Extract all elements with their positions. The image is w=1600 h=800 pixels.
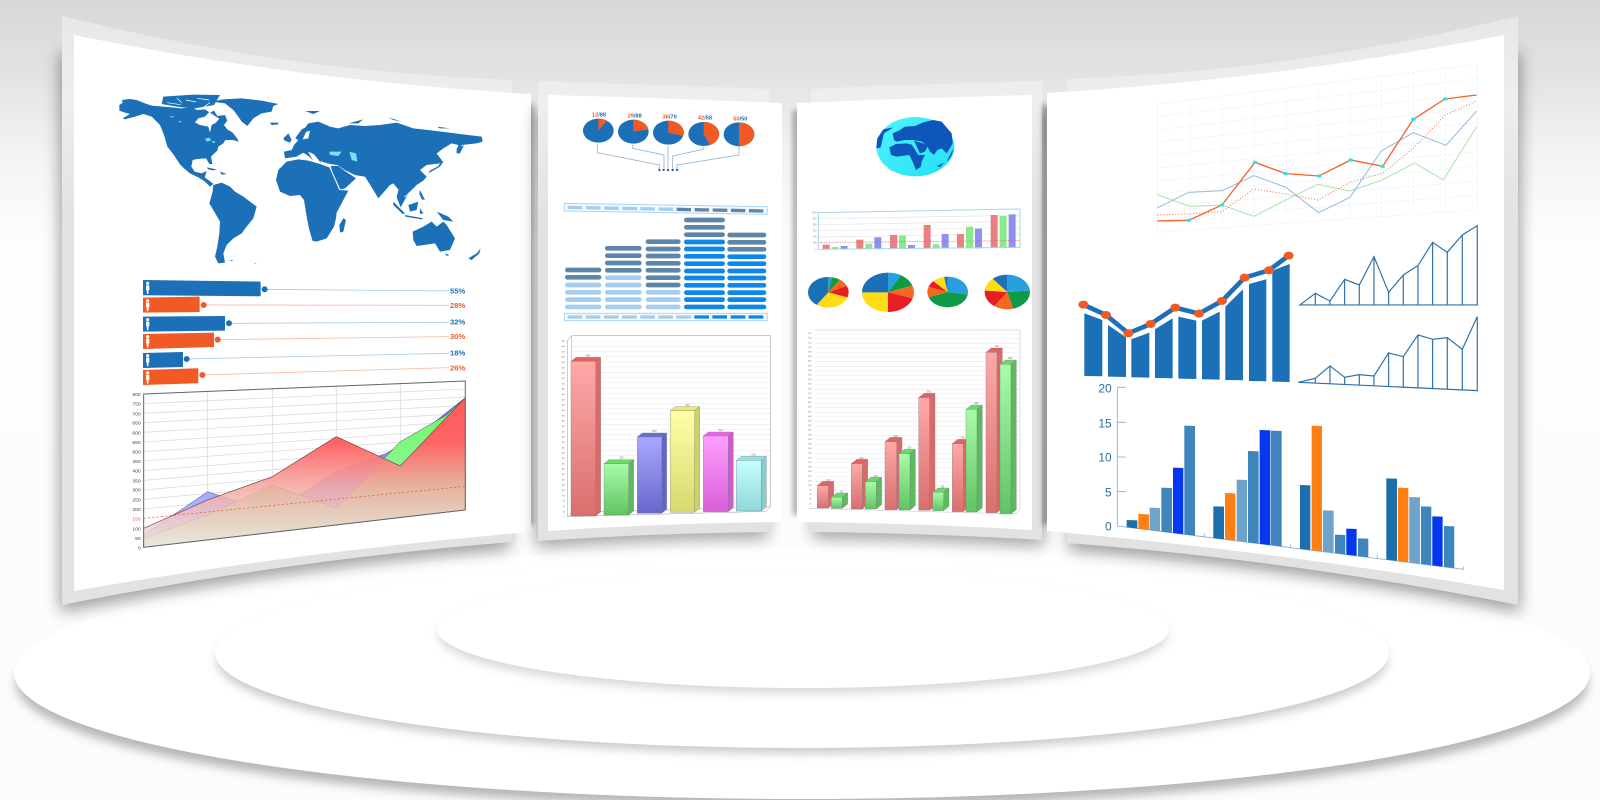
3D bar chart: 200 xyxy=(619,456,624,460)
small grouped bar chart: 150 xyxy=(813,242,817,244)
area chart: 0 xyxy=(138,545,141,551)
3D paired bar chart: 0 xyxy=(810,508,811,510)
horizontal percentage bars: 55% xyxy=(450,287,465,296)
3D paired bar chart: 700 xyxy=(994,344,999,348)
area chart: 400 xyxy=(132,469,141,475)
3D bar chart: 120 xyxy=(562,485,565,487)
3D bar chart: 100 xyxy=(562,490,565,492)
3D bar chart: 340 xyxy=(562,426,565,428)
pie 3 xyxy=(927,277,968,307)
3D paired bar chart: 760 xyxy=(808,333,811,335)
3D bar chart: 380 xyxy=(562,415,565,417)
small grouped bar chart: 600 xyxy=(813,225,817,227)
3D paired bar chart: 120 xyxy=(808,480,811,482)
3D paired bar chart: 200 xyxy=(808,462,811,464)
3D bar chart: 60 xyxy=(563,501,565,503)
area chart: 100 xyxy=(132,526,141,532)
grouped bar chart xyxy=(1098,382,1463,569)
3D bar chart: 460 xyxy=(562,394,565,396)
3D bar chart: 600 xyxy=(562,357,565,359)
pie 4 xyxy=(985,275,1030,309)
3D paired bar chart xyxy=(808,330,1020,514)
3D paired bar chart: 100 xyxy=(826,478,831,482)
3D bar chart: 500 xyxy=(562,383,565,385)
3D paired bar chart: 250 xyxy=(907,446,912,450)
3D paired bar chart: 580 xyxy=(808,375,811,377)
3D bar chart: 200 xyxy=(562,463,565,465)
area chart: 750 xyxy=(132,402,141,408)
four pie charts xyxy=(808,273,1030,312)
3D paired bar chart: 260 xyxy=(808,448,811,450)
area chart: 150 xyxy=(132,517,141,523)
3D paired bar chart: 700 xyxy=(808,347,811,349)
3D paired bar chart: 100 xyxy=(808,485,811,487)
stage: concentric floor ellipses xyxy=(14,547,1590,800)
3D paired bar chart: 420 xyxy=(808,411,811,413)
3D bar chart: 0 xyxy=(564,517,565,519)
pie 1 xyxy=(808,277,849,308)
3D paired bar chart: 20 xyxy=(809,503,811,505)
3D bar chart: 20 xyxy=(563,511,565,513)
3D paired bar chart: 600 xyxy=(808,370,811,372)
panel: centre-left pies and bar charts xyxy=(536,81,782,547)
grouped bar chart: 10 xyxy=(1098,451,1112,465)
horizontal percentage bars: 26% xyxy=(450,363,465,372)
3D bar chart: 220 xyxy=(751,453,756,457)
3D paired bar chart: 660 xyxy=(808,356,811,358)
grouped bar chart: 15 xyxy=(1098,416,1112,430)
3D paired bar chart: 300 xyxy=(808,439,811,441)
3D paired bar chart: 520 xyxy=(808,388,811,390)
3D bar chart: 360 xyxy=(562,421,565,423)
stacked pill column chart xyxy=(564,203,767,321)
area chart: 300 xyxy=(132,488,141,494)
fraction pies with connectors: 50/50 xyxy=(733,116,747,122)
3D bar chart: 540 xyxy=(562,373,565,375)
3D paired bar chart: 360 xyxy=(808,425,811,427)
small grouped bar chart: 300 xyxy=(813,237,817,239)
horizontal percentage bars: 28% xyxy=(450,301,465,310)
3D bar chart: 560 xyxy=(562,367,565,369)
grouped bar chart: 0 xyxy=(1105,519,1112,533)
horizontal percentage bars: 18% xyxy=(450,348,465,357)
multi-series line chart xyxy=(1157,64,1477,232)
3D paired bar chart: 650 xyxy=(1008,356,1013,360)
3D bar chart: 160 xyxy=(562,474,565,476)
area chart: 550 xyxy=(132,440,141,446)
area chart: 50 xyxy=(135,536,141,542)
area chart: 250 xyxy=(132,497,141,503)
area chart: 450 xyxy=(132,459,141,465)
3D bar chart: 220 xyxy=(562,458,565,460)
3D paired bar chart: 460 xyxy=(808,402,811,404)
3D paired bar chart: 80 xyxy=(809,490,811,492)
small grouped bar chart: 0 xyxy=(815,249,817,251)
3D bar chart: 320 xyxy=(562,431,565,433)
outline area chart top xyxy=(1300,226,1477,305)
panel: centre-right globe, pies and bars xyxy=(793,81,1044,546)
3D bar chart: 40 xyxy=(563,506,565,508)
area chart: 350 xyxy=(132,478,141,484)
3D paired bar chart: 560 xyxy=(808,379,811,381)
3D paired bar chart: 720 xyxy=(808,342,811,344)
world map xyxy=(119,95,483,264)
outline area chart bottom xyxy=(1298,317,1477,391)
3D bar chart: 180 xyxy=(562,469,565,471)
area chart: 600 xyxy=(132,430,141,436)
3D bar chart: 640 xyxy=(562,346,565,348)
3D paired bar chart: 160 xyxy=(808,471,811,473)
3D bar chart: 520 xyxy=(562,378,565,380)
horizontal percentage bars: 30% xyxy=(450,332,465,341)
grouped bar chart: 20 xyxy=(1098,382,1112,396)
3D paired bar chart: 450 xyxy=(974,401,979,405)
3D bar chart: 300 xyxy=(652,429,657,433)
3D paired bar chart: 540 xyxy=(808,384,811,386)
area chart: 200 xyxy=(132,507,141,513)
area chart: 650 xyxy=(132,421,141,427)
3D bar chart: 140 xyxy=(562,479,565,481)
horizontal percentage bars: 32% xyxy=(450,318,465,327)
fraction pies with connectors: 12/88 xyxy=(592,113,606,119)
fraction pies with connectors: 36/70 xyxy=(663,115,677,121)
3D paired bar chart: 320 xyxy=(808,434,811,436)
panel: right line and bar charts xyxy=(1043,16,1520,612)
3D bar chart: 80 xyxy=(563,495,565,497)
grouped bar chart: 5 xyxy=(1105,485,1112,499)
3D paired bar chart: 140 xyxy=(808,476,811,478)
3D bar chart: 400 xyxy=(562,410,565,412)
area chart: 800 xyxy=(132,392,141,398)
3D paired bar chart: 680 xyxy=(808,352,811,354)
3D paired bar chart: 400 xyxy=(808,416,811,418)
3D paired bar chart: 740 xyxy=(808,338,811,340)
fraction pies with connectors: 29/88 xyxy=(628,114,642,120)
3D bar chart: 260 xyxy=(562,447,565,449)
3D bar chart: 480 xyxy=(562,389,565,391)
3D bar chart: 580 xyxy=(562,362,565,364)
3D paired bar chart: 380 xyxy=(808,421,811,423)
small grouped bar chart: 1000 xyxy=(811,213,817,215)
pie 2 xyxy=(862,273,914,312)
3D bar chart: 300 xyxy=(562,437,565,439)
3D paired bar chart: 500 xyxy=(927,389,932,393)
3D bar chart: 660 xyxy=(562,341,565,343)
3D paired bar chart: 340 xyxy=(808,430,811,432)
3D paired bar chart: 620 xyxy=(808,365,811,367)
3D bar chart: 600 xyxy=(586,353,591,357)
3D paired bar chart: 60 xyxy=(809,494,811,496)
area chart: 700 xyxy=(132,411,141,417)
3D paired bar chart: 50 xyxy=(840,489,844,493)
3D paired bar chart: 180 xyxy=(808,467,811,469)
3D paired bar chart: 240 xyxy=(808,453,811,455)
3D bar chart xyxy=(562,336,771,519)
3D paired bar chart: 40 xyxy=(809,499,811,501)
3D bar chart: 400 xyxy=(685,403,690,407)
3D paired bar chart: 480 xyxy=(808,398,811,400)
3D bar chart: 620 xyxy=(562,351,565,353)
3D paired bar chart: 200 xyxy=(859,456,864,460)
3D paired bar chart: 80 xyxy=(941,484,945,488)
3D paired bar chart: 280 xyxy=(808,444,811,446)
3D bar chart: 440 xyxy=(562,399,565,401)
3D paired bar chart: 440 xyxy=(808,407,811,409)
area chart xyxy=(132,381,465,551)
3D bar chart: 420 xyxy=(562,405,565,407)
horizontal percentage bars xyxy=(143,280,465,385)
3D paired bar chart: 220 xyxy=(808,457,811,459)
3D bar chart: 310 xyxy=(718,428,723,432)
fraction pies with connectors: 42/58 xyxy=(698,116,712,122)
fraction pies with connectors xyxy=(583,113,754,171)
panel: left world map and area chart xyxy=(60,16,533,612)
area chart: 500 xyxy=(132,449,141,455)
bar chart with trend line xyxy=(1078,252,1294,382)
3D paired bar chart: 500 xyxy=(808,393,811,395)
icon: globe xyxy=(876,117,954,176)
3D paired bar chart: 120 xyxy=(873,474,878,478)
small grouped bar chart xyxy=(811,209,1020,251)
3D paired bar chart: 640 xyxy=(808,361,811,363)
3D paired bar chart: 300 xyxy=(960,435,965,439)
small grouped bar chart: 800 xyxy=(813,219,817,221)
small grouped bar chart: 500 xyxy=(813,231,817,233)
3D bar chart: 280 xyxy=(562,442,565,444)
3D paired bar chart: 300 xyxy=(893,434,898,438)
3D bar chart: 240 xyxy=(562,453,565,455)
